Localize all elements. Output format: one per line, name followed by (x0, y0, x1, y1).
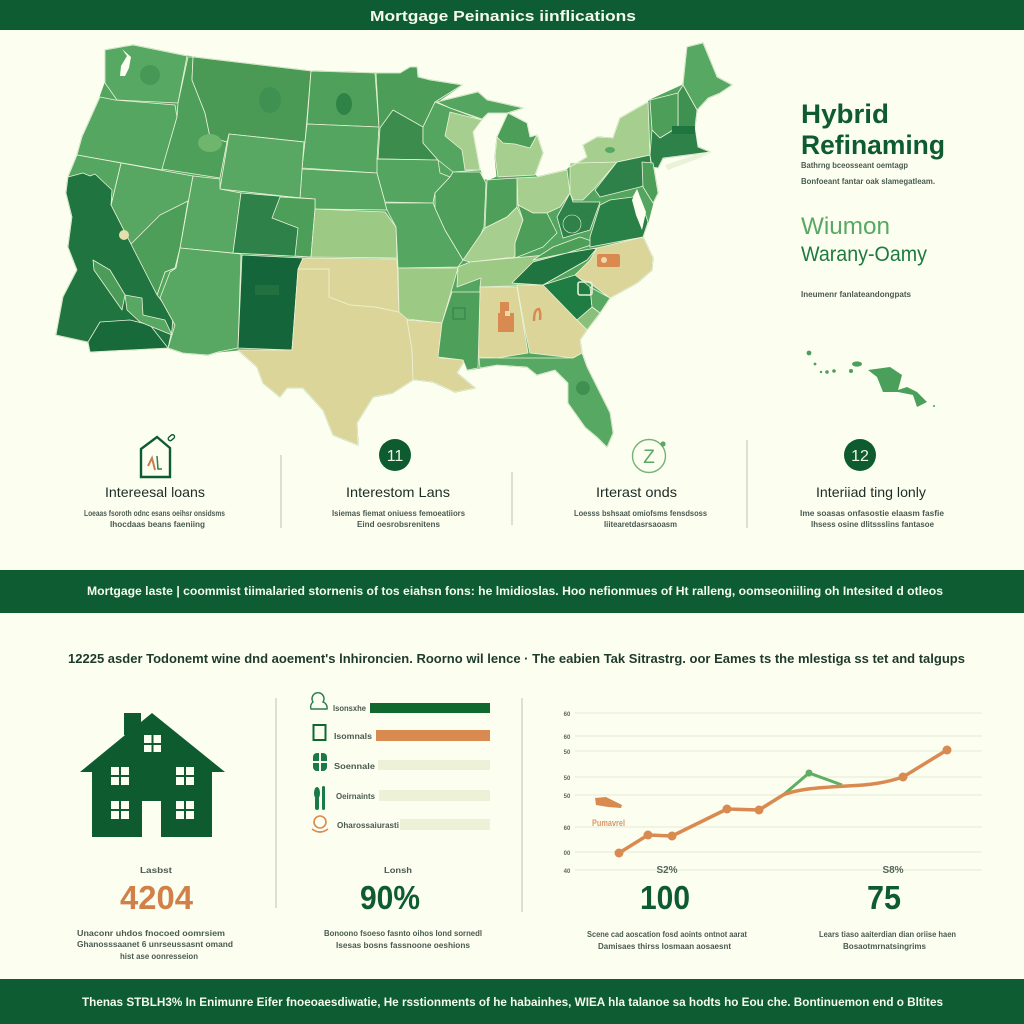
feature: interiiad ting lonly (800, 439, 945, 529)
feature: interest loans: Intereesal loans (105, 484, 205, 500)
row 3: Soennale (334, 762, 376, 771)
stat: 75: 75 (867, 879, 901, 916)
stat: 75: S8% (882, 865, 904, 876)
heading: Hybrid Refinaming (801, 99, 945, 160)
badge: 12 (844, 439, 876, 471)
stat: 4204: 4204 (120, 879, 194, 916)
heading: Hybrid Refinaming: Hybrid (801, 99, 889, 129)
land silhouette (56, 43, 732, 447)
chart marker and label: Pumavrel (592, 818, 625, 828)
chart marker and label (592, 797, 625, 828)
row 5: Oharossaiurasti (337, 821, 399, 830)
feature: interest loans (84, 434, 225, 529)
row 4: Oeirnaints (336, 792, 376, 801)
text block: description: Bathrng bceosseant oemtagp (801, 161, 908, 170)
stat: 100: Damisaes thirss losmaan aosaesnt (598, 942, 731, 951)
heading: Hybrid Refinaming: Refinaming (801, 130, 945, 160)
icon: orange feather on Georgia (534, 309, 540, 321)
feature: interest onds: Loesss bshsaat omiofsms fensdsoss (574, 509, 708, 518)
title bar: Mortgage Peinanics iinflications (370, 8, 636, 25)
Texas and Oklahoma (238, 258, 413, 445)
axis labels: 50 (564, 750, 571, 756)
row 5 (312, 816, 490, 832)
text block: note: Ineumenr fanlateandongpats (801, 290, 912, 299)
text block: description (801, 161, 935, 186)
axis labels: 40 (564, 869, 571, 875)
subheading: Wiumon Warany-Oamy: Warany-Oamy (801, 243, 927, 266)
subheading: Wiumon Warany-Oamy: Wiumon (801, 213, 890, 240)
banner: footer (0, 979, 1024, 1024)
banner: middle (0, 570, 1024, 613)
axis labels: 50 (564, 776, 571, 782)
stat: 75: Bosaotmrnatsingrims (843, 942, 927, 951)
feature: interestom lans: Interestom Lans (346, 484, 450, 500)
stat: 4204: Lasbst (140, 866, 172, 875)
icon: orange building on Alabama (498, 302, 514, 332)
badge: 12: 12 (851, 448, 869, 465)
axis labels (564, 712, 571, 875)
stat: 4204 (77, 866, 233, 961)
feature: interest onds: Irterast onds (596, 484, 677, 500)
orange line (614, 746, 952, 858)
axis labels: 60 (564, 735, 571, 741)
title bar (0, 0, 1024, 30)
stat: 75 (819, 865, 956, 951)
icon: house tag (141, 434, 175, 477)
state group: west (56, 45, 413, 445)
row 2: Isomnals (334, 732, 373, 741)
green line (782, 773, 842, 796)
row 1 (311, 693, 490, 713)
feature: interest loans: Ihocdaas beans faeniing (110, 520, 205, 529)
feature: interestom lans (332, 439, 466, 529)
water and map details (119, 49, 712, 395)
stat: 90% (324, 866, 482, 950)
feature: interiiad ting lonly: Ihsess osine dlitssslins fantasoe (811, 520, 935, 529)
axis labels: 60 (564, 712, 571, 718)
feature: interestom lans: Isiemas fiemat oniuess femoeatiiors (332, 509, 466, 518)
feature: interestom lans: Eind oesrobsrenitens (357, 520, 441, 529)
chart: line chart (564, 712, 982, 875)
feature: interest loans: Loeaas fsoroth odnc esans oeihsr onsidsms (84, 509, 225, 518)
banner: footer: Thenas STBLH3% In Enimunre Eifer fnoeoaesdiwatie, He rsstionments of he habainhes, WIEA hla talanoe sa hodts ho Eou che. Bontinuemon end o Bltites (82, 995, 943, 1009)
stat: 100 (587, 865, 747, 951)
stat: 4204: hist ase oonresseion (120, 952, 198, 961)
subheading: Wiumon Warany-Oamy (801, 213, 927, 266)
feature: interiiad ting lonly: Interiiad ting lonly (816, 484, 926, 500)
stat: 4204: Unaconr uhdos fnocoed oomrsiem (77, 929, 225, 938)
row 2 (314, 725, 490, 741)
icon: orange badge on North Carolina (597, 254, 620, 267)
stat: 90%: Isesas bosns fassnoone oeshions (336, 941, 471, 950)
feature: interiiad ting lonly: Ime soasas onfasostie elaasm fasfie (800, 509, 945, 518)
icon: Z circle: Z (643, 447, 655, 468)
axis labels: 60 (564, 826, 571, 832)
row 4 (314, 786, 490, 810)
row 3 (313, 753, 490, 771)
text block: description: Bonfoeant fantar oak slamegatleam. (801, 177, 935, 186)
badge: 11: 11 (387, 448, 403, 465)
subtitle line: 12225 asder Todonemt wine dnd aoement's lnhironcien. Roorno wil lence · The eabien Tak Sitrastrg. oor Eames ts the mlestiga ss tet and talgups (68, 651, 965, 666)
stat: 4204: Ghanosssaanet 6 unrseussasnt omand (77, 940, 233, 949)
state group: south and east (438, 43, 732, 447)
stat: 100: 100 (640, 879, 690, 916)
stat: 90%: 90% (360, 879, 420, 916)
state group: midwest (376, 67, 570, 392)
stat: 90%: Lonsh (384, 866, 412, 875)
stat: 100: Scene cad aoscation fosd aoints ontnot aarat (587, 930, 747, 939)
stat: 90%: Bonoono fsoeso fasnto oihos lond sornedl (324, 929, 482, 938)
map of US states (56, 43, 732, 447)
stat: 100: S2% (656, 865, 678, 876)
row 1: Isonsxhe (333, 704, 367, 713)
icon: house (80, 713, 225, 837)
stat: 75: Lears tiaso aaiterdian dian oriise haen (819, 930, 956, 939)
map inset: islands (807, 351, 935, 407)
feature: interest onds: Iiitearetdasrsaoasm (604, 520, 677, 529)
banner: middle: Mortgage laste | coommist tiimalaried stornenis of tos eiahsn fons: he lmidioslas. Hoo nefionmues of Ht ralleng, oomseoniiling oh Intesited d otleos (87, 584, 943, 598)
feature: interest onds (574, 440, 708, 529)
chart: horizontal bars with icons (311, 693, 490, 832)
axis labels: 50 (564, 794, 571, 800)
axis labels: 00 (564, 851, 571, 857)
